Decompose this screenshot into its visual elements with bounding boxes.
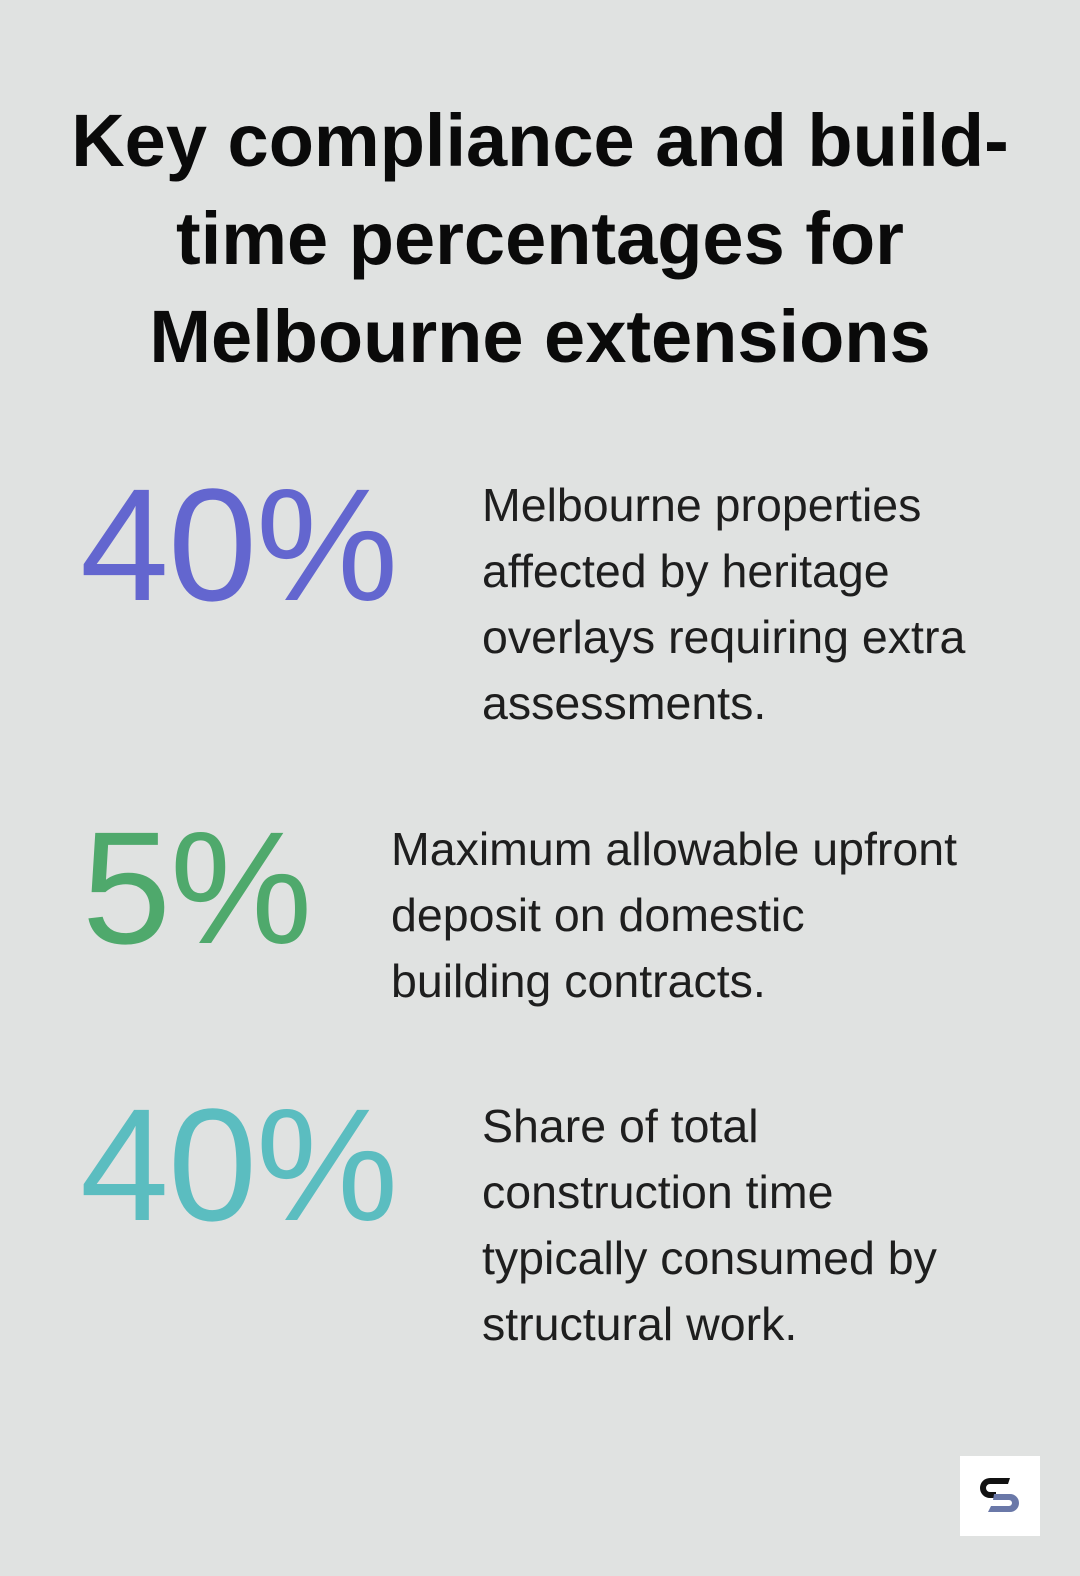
stat 3 text: Share of total	[482, 1100, 759, 1152]
stat 1 number: 40%	[80, 455, 397, 634]
stat 3 text: structural work.	[482, 1298, 797, 1350]
stat 3 text: typically consumed by	[482, 1232, 937, 1284]
stat 2 text: deposit on domestic	[391, 889, 805, 941]
title: Melbourne extensions	[149, 295, 931, 378]
stat 2 text: Maximum allowable upfront	[391, 823, 957, 875]
stat 2 text: building contracts.	[391, 955, 766, 1007]
stat 1 text: overlays requiring extra	[482, 611, 965, 663]
title: Key compliance and build-	[71, 99, 1009, 182]
stat 1 text: affected by heritage	[482, 545, 890, 597]
stat 1 text	[482, 479, 966, 729]
stat 2 number: 5%	[82, 798, 311, 977]
stat 3 text: construction time	[482, 1166, 833, 1218]
stat 1 text: Melbourne properties	[482, 479, 921, 531]
stat 2 text	[391, 823, 957, 1007]
stat 3 text	[482, 1100, 937, 1350]
stat 3 number: 40%	[80, 1075, 397, 1254]
title	[71, 99, 1009, 378]
logo	[960, 1456, 1040, 1536]
stat 1 text: assessments.	[482, 677, 766, 729]
title: time percentages for	[176, 197, 904, 280]
